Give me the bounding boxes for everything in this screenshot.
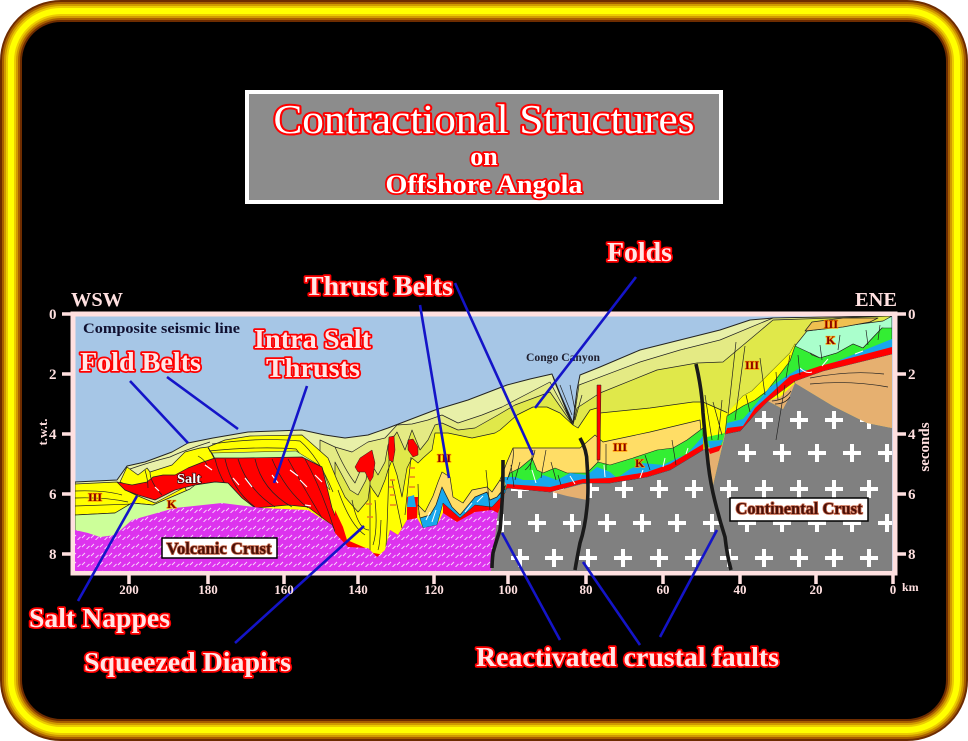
continental crust [491, 383, 892, 571]
red salt middle [505, 444, 703, 492]
title panel [247, 92, 721, 202]
white flecks in salt [154, 464, 322, 507]
distance axis numbers: 180 [198, 582, 218, 597]
tan pre-salt sediments [552, 354, 892, 500]
reactivated crustal faults [492, 364, 731, 570]
stratigraphic unit markers: III [745, 358, 759, 372]
title panel: Offshore Angola [386, 170, 582, 199]
distance axis numbers [119, 582, 896, 597]
small text: composite seismic line: Composite seismic line [83, 321, 240, 337]
stratigraphic unit markers: III [437, 451, 451, 465]
distance axis numbers: 0 [890, 582, 896, 597]
light orange layer [500, 420, 705, 500]
yellow layer [208, 344, 795, 571]
white fold highlights [426, 496, 483, 522]
heading: reactivated crustal faults: Reactivated crustal faults [476, 642, 779, 672]
salt markers beside diapirs [366, 468, 415, 517]
direction labels [71, 289, 897, 311]
heading: squeezed diapirs: Squeezed Diapirs [84, 647, 291, 677]
pale green band above salt [212, 451, 330, 490]
right depth axis numbers [908, 307, 916, 563]
axis frame and ticks [62, 314, 906, 584]
allochthonous salt body [116, 456, 336, 534]
left depth axis numbers: 2 [49, 367, 56, 383]
stratigraphic unit markers [88, 317, 838, 511]
direction labels: WSW [71, 289, 123, 311]
distance axis numbers: 80 [580, 582, 592, 597]
heading: salt nappes: Salt Nappes [29, 603, 170, 633]
heading: thrust belts: Thrust Belts [305, 271, 453, 301]
stratigraphic unit markers: III [824, 317, 838, 331]
heading: fold belts: Fold Belts [80, 347, 201, 377]
fold-belt strata lines [75, 440, 369, 535]
orange fold crest [418, 472, 505, 518]
heading: intra salt thrusts [254, 324, 371, 383]
right depth axis numbers: 0 [908, 307, 916, 323]
stratigraphic unit markers: K [635, 456, 645, 470]
blue layer at diapir [407, 495, 416, 507]
squeezed salt diapirs [355, 385, 601, 482]
white basement crosses [493, 411, 896, 567]
distance axis numbers: 120 [424, 582, 444, 597]
direction labels: ENE [855, 289, 897, 311]
left depth axis numbers: 0 [49, 307, 56, 323]
intra-salt thrust lines [145, 448, 335, 532]
upper pale sediment layer [75, 316, 869, 502]
red salt east [725, 347, 892, 434]
left depth axis numbers: 4 [49, 427, 57, 443]
heading: intra salt thrusts: Intra Salt [254, 324, 371, 354]
right depth axis numbers: 8 [908, 547, 916, 563]
axis title: t.w.t.: t.w.t. [35, 418, 50, 446]
second pale layer [320, 316, 864, 494]
label box: volcanic crust: Volcanic Crust [166, 539, 272, 558]
graben fill layers [707, 433, 725, 454]
volcanic crust [75, 503, 498, 571]
title panel: on [470, 142, 498, 171]
heading: intra salt thrusts: Thrusts [266, 353, 360, 383]
distance axis numbers: 200 [119, 582, 139, 597]
green layer east [725, 328, 892, 434]
orange upper layer [805, 318, 878, 331]
left depth axis numbers: 8 [49, 547, 56, 563]
right depth axis numbers: 6 [908, 487, 916, 503]
left depth axis numbers: 6 [49, 487, 57, 503]
west yellow strata [75, 482, 190, 515]
stratigraphic unit markers: III [613, 440, 627, 454]
pale green K layer [75, 482, 254, 537]
white salt-weld highlights [532, 351, 863, 484]
middle olive-yellow layer [334, 316, 892, 512]
blue layer east [725, 339, 892, 434]
red salt in the basin [443, 493, 505, 524]
red salt tail and residual salt [335, 497, 418, 558]
km unit: km [902, 580, 919, 594]
mint layer [795, 316, 892, 360]
right depth axis numbers: 4 [908, 427, 916, 443]
diapir stems and folds [370, 457, 598, 555]
tan strata lines [772, 373, 888, 404]
label box: continental crust: Continental Crust [736, 499, 863, 518]
geological cross-section [75, 316, 896, 571]
small text: Congo Canyon: Congo Canyon [526, 352, 601, 364]
stratigraphic unit markers: K [826, 333, 836, 347]
stratigraphic unit markers: III [88, 490, 102, 504]
title panel: Contractional Structures [274, 96, 694, 142]
west yellow cap over salt [120, 447, 215, 487]
distance axis numbers: 60 [656, 582, 670, 597]
distance axis numbers: 100 [498, 582, 518, 597]
blue leader lines [78, 277, 717, 645]
distance axis numbers: 160 [274, 582, 294, 597]
stratigraphic unit markers: K [167, 497, 177, 511]
left depth axis numbers [49, 307, 57, 563]
label: salt: Salt [177, 472, 201, 487]
heading: folds: Folds [607, 237, 672, 267]
blue layer in the basin [420, 487, 507, 528]
thin yellow band above graben edge [727, 344, 795, 416]
axis title: seconds: seconds [917, 422, 933, 472]
minor fault lines [486, 325, 880, 510]
blue layer middle [503, 436, 703, 492]
distance axis numbers: 20 [810, 582, 822, 597]
right depth axis numbers: 2 [908, 367, 916, 383]
green layer middle [504, 428, 703, 492]
distance axis numbers: 140 [348, 582, 368, 597]
distance axis numbers: 40 [734, 582, 746, 597]
